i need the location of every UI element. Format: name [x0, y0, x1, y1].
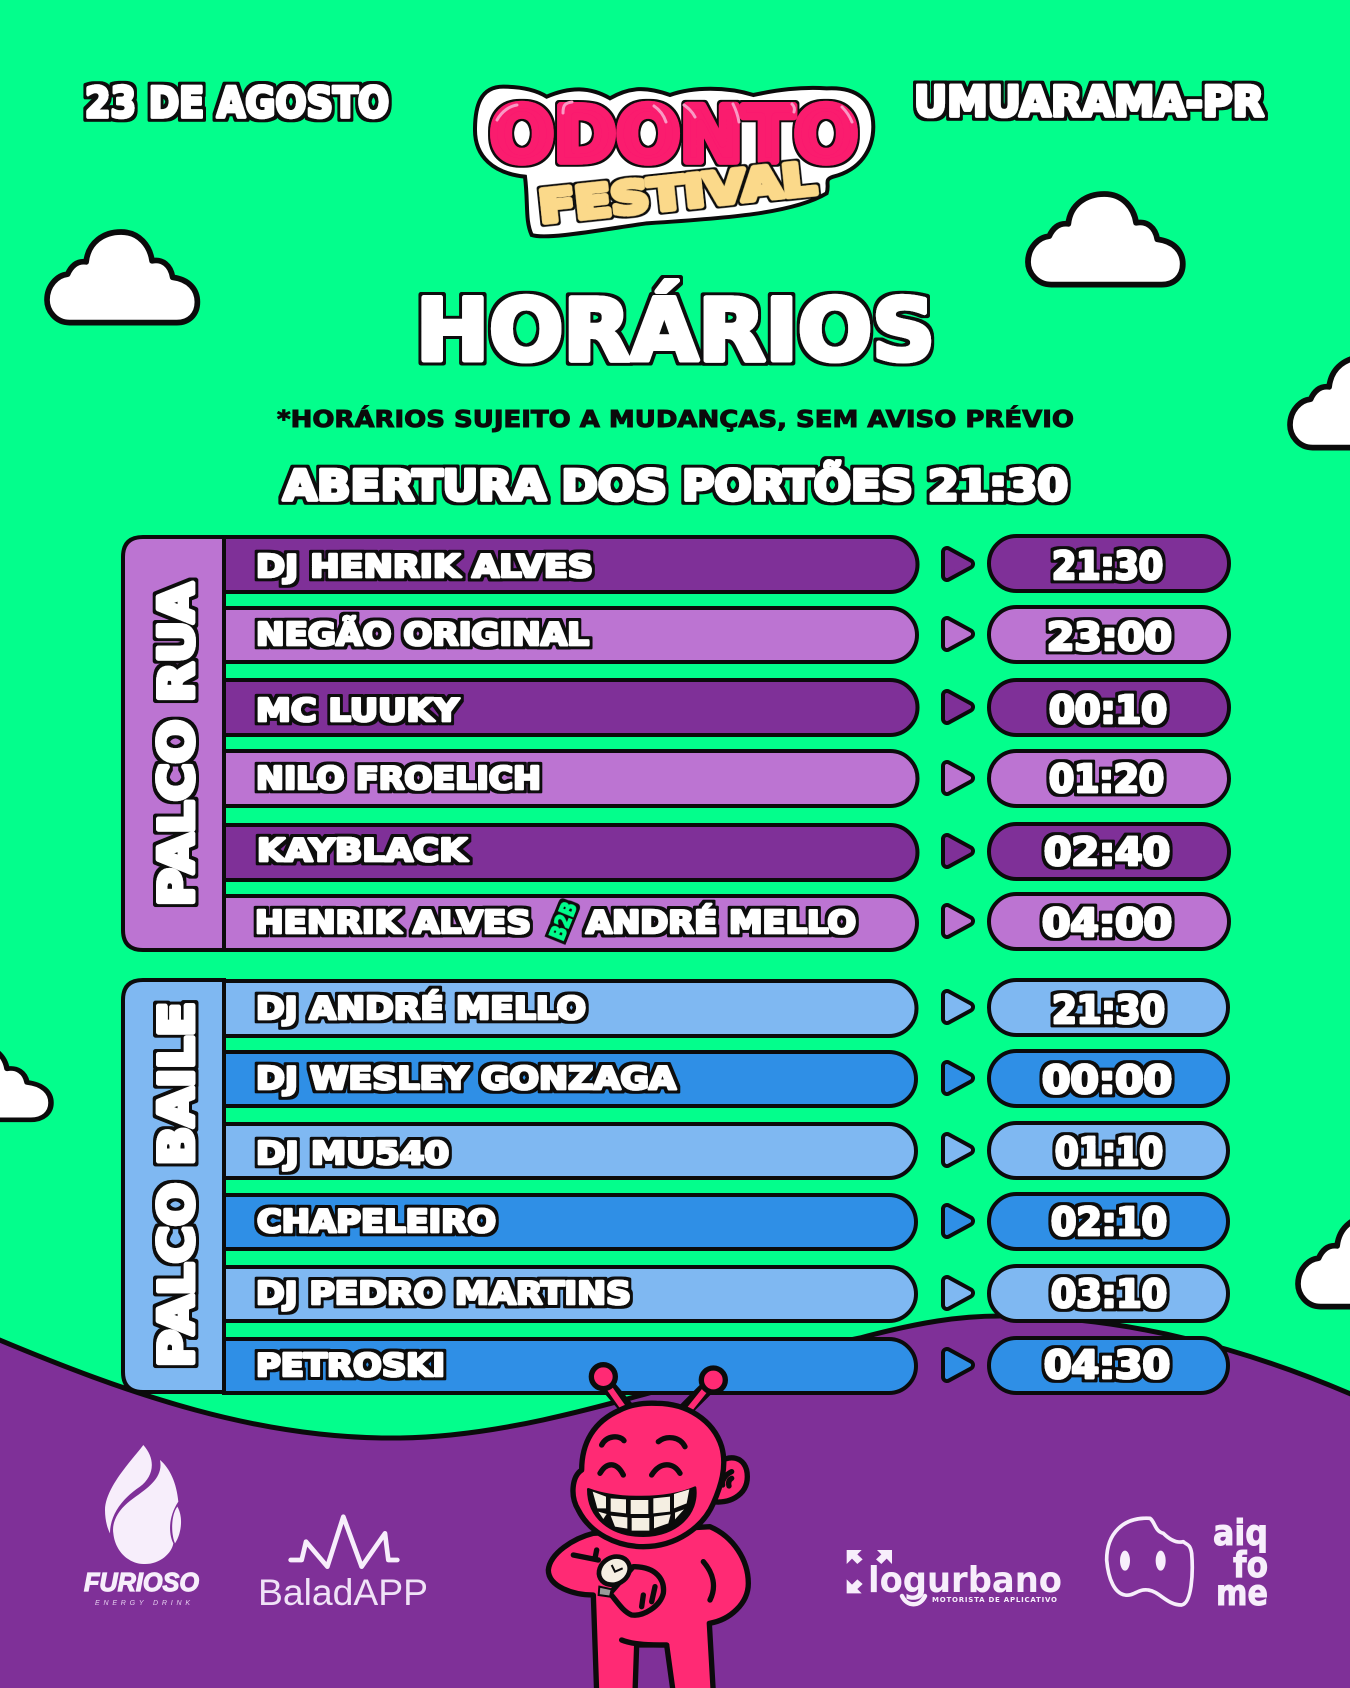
row Kayblack: 02:40	[1044, 830, 1170, 874]
mascot hand	[610, 1567, 664, 1615]
mascot face lines	[600, 1437, 732, 1486]
row Henrik Alves B2B André Mello: 04:00	[1042, 901, 1172, 945]
row DJ Henrik Alves: 21:30	[1052, 544, 1163, 588]
row DJ MU540: DJ MU540	[256, 1136, 449, 1172]
mascot body	[548, 1527, 748, 1688]
row Petroski: PETROSKI	[256, 1348, 445, 1384]
row DJ Henrik Alves	[224, 536, 1229, 592]
gates opening: ABERTURA DOS PORTÕES 21:30	[283, 460, 1068, 510]
row Negão Original	[224, 607, 1229, 662]
logo word Odonto: ODONTO	[490, 90, 858, 179]
logo: Furioso	[84, 1445, 199, 1607]
mascot arm details	[573, 1550, 713, 1645]
logo: BaladAPP	[258, 1517, 428, 1613]
purple hill footer	[0, 1316, 1350, 1688]
row DJ Pedro Martins: 03:10	[1051, 1272, 1167, 1316]
row DJ Pedro Martins: DJ PEDRO MARTINS	[256, 1276, 631, 1312]
watch face	[594, 1551, 635, 1590]
row DJ Wesley Gonzaga: DJ WESLEY GONZAGA	[256, 1061, 676, 1097]
mascot antennae	[591, 1365, 725, 1415]
row Nilo Froelich	[224, 751, 1229, 806]
cloud right middle	[1290, 357, 1350, 448]
logo word Festival: FESTIVAL	[536, 154, 818, 233]
row MC Luuky	[224, 680, 1229, 735]
logo: aiqfome	[1107, 1513, 1268, 1614]
row Nilo Froelich: 01:20	[1049, 757, 1164, 801]
logo sticker backing	[475, 87, 873, 236]
logo: Logurbano	[847, 1550, 1062, 1604]
note: *HORÁRIOS SUJEITO A MUDANÇAS, SEM AVISO PRÉVIO	[277, 405, 1074, 433]
row MC Luuky: MC LUUKY	[256, 693, 460, 729]
panel: palco rua	[123, 536, 1229, 950]
row Negão Original: 23:00	[1047, 615, 1172, 659]
row DJ André Mello: 21:30	[1052, 988, 1165, 1032]
stage label tab	[123, 980, 224, 1392]
logo: Odonto Festival	[475, 87, 873, 236]
pulse crown	[291, 1517, 397, 1567]
row Kayblack	[224, 824, 1229, 880]
mascot mouth	[588, 1488, 695, 1536]
row Chapeleiro	[224, 1194, 1228, 1249]
smile	[902, 1596, 925, 1604]
location: UMUARAMA-PR	[914, 77, 1264, 126]
brand name line 3: me	[1216, 1573, 1268, 1614]
row DJ André Mello	[224, 980, 1228, 1036]
tagline: MOTORISTA DE APLICATIVO	[932, 1596, 1057, 1604]
brand name line 1: aiq	[1213, 1513, 1268, 1554]
brand name: FURIOSO	[84, 1567, 199, 1597]
cloud left lower	[0, 1045, 51, 1120]
flame mark	[105, 1445, 181, 1564]
row DJ MU540: 01:10	[1055, 1130, 1163, 1174]
row DJ Wesley Gonzaga: 00:00	[1042, 1058, 1172, 1102]
mascot teeth	[593, 1489, 689, 1531]
cloud top left	[47, 232, 197, 323]
icon: pink mascot checking watch	[548, 1365, 748, 1688]
mascot fingers	[642, 1587, 655, 1607]
row DJ André Mello: DJ ANDRÉ MELLO	[256, 991, 586, 1027]
panel: palco baile	[123, 980, 1228, 1393]
row Henrik Alves B2B André Mello: B2B	[545, 899, 582, 944]
mascot head	[573, 1403, 724, 1547]
logo highlights	[497, 102, 852, 122]
row DJ MU540	[224, 1123, 1228, 1178]
cloud right lower	[1298, 1216, 1350, 1307]
date: 23 DE AGOSTO	[85, 78, 389, 127]
title: HORÁRIOS	[416, 281, 935, 381]
row DJ Henrik Alves: DJ HENRIK ALVES	[256, 549, 593, 585]
row Negão Original: NEGÃO ORIGINAL	[256, 616, 589, 653]
row DJ Pedro Martins	[224, 1266, 1228, 1321]
row MC Luuky: 00:10	[1049, 688, 1167, 732]
row Chapeleiro: CHAPELEIRO	[257, 1204, 496, 1240]
stage label tab	[123, 537, 224, 950]
row Nilo Froelich: NILO FROELICH	[256, 761, 541, 797]
brand name: logurbano	[868, 1560, 1062, 1601]
stage name: PALCO RUA	[150, 582, 205, 906]
row Kayblack: KAYBLACK	[257, 833, 468, 869]
row DJ Wesley Gonzaga	[224, 1051, 1228, 1106]
brand name: BaladAPP	[258, 1572, 428, 1613]
row Chapeleiro: 02:10	[1051, 1200, 1167, 1244]
row Henrik Alves B2B André Mello: ANDRÉ MELLO	[586, 905, 856, 941]
expand arrows	[847, 1550, 892, 1593]
brand name line 2: fo	[1233, 1545, 1268, 1586]
row Henrik Alves B2B André Mello: HENRIK ALVES	[255, 905, 531, 941]
row Petroski: 04:30	[1044, 1343, 1170, 1387]
brand tagline: ENERGY DRINK	[95, 1600, 190, 1607]
bitten ghost icon	[1107, 1518, 1192, 1605]
row Henrik Alves B2B André Mello	[224, 894, 1229, 950]
stage name: PALCO BAILE	[150, 1002, 205, 1367]
row Petroski	[224, 1338, 1228, 1393]
mascot ear	[713, 1458, 747, 1502]
watch strap	[599, 1587, 612, 1597]
cloud top right	[1028, 194, 1183, 285]
